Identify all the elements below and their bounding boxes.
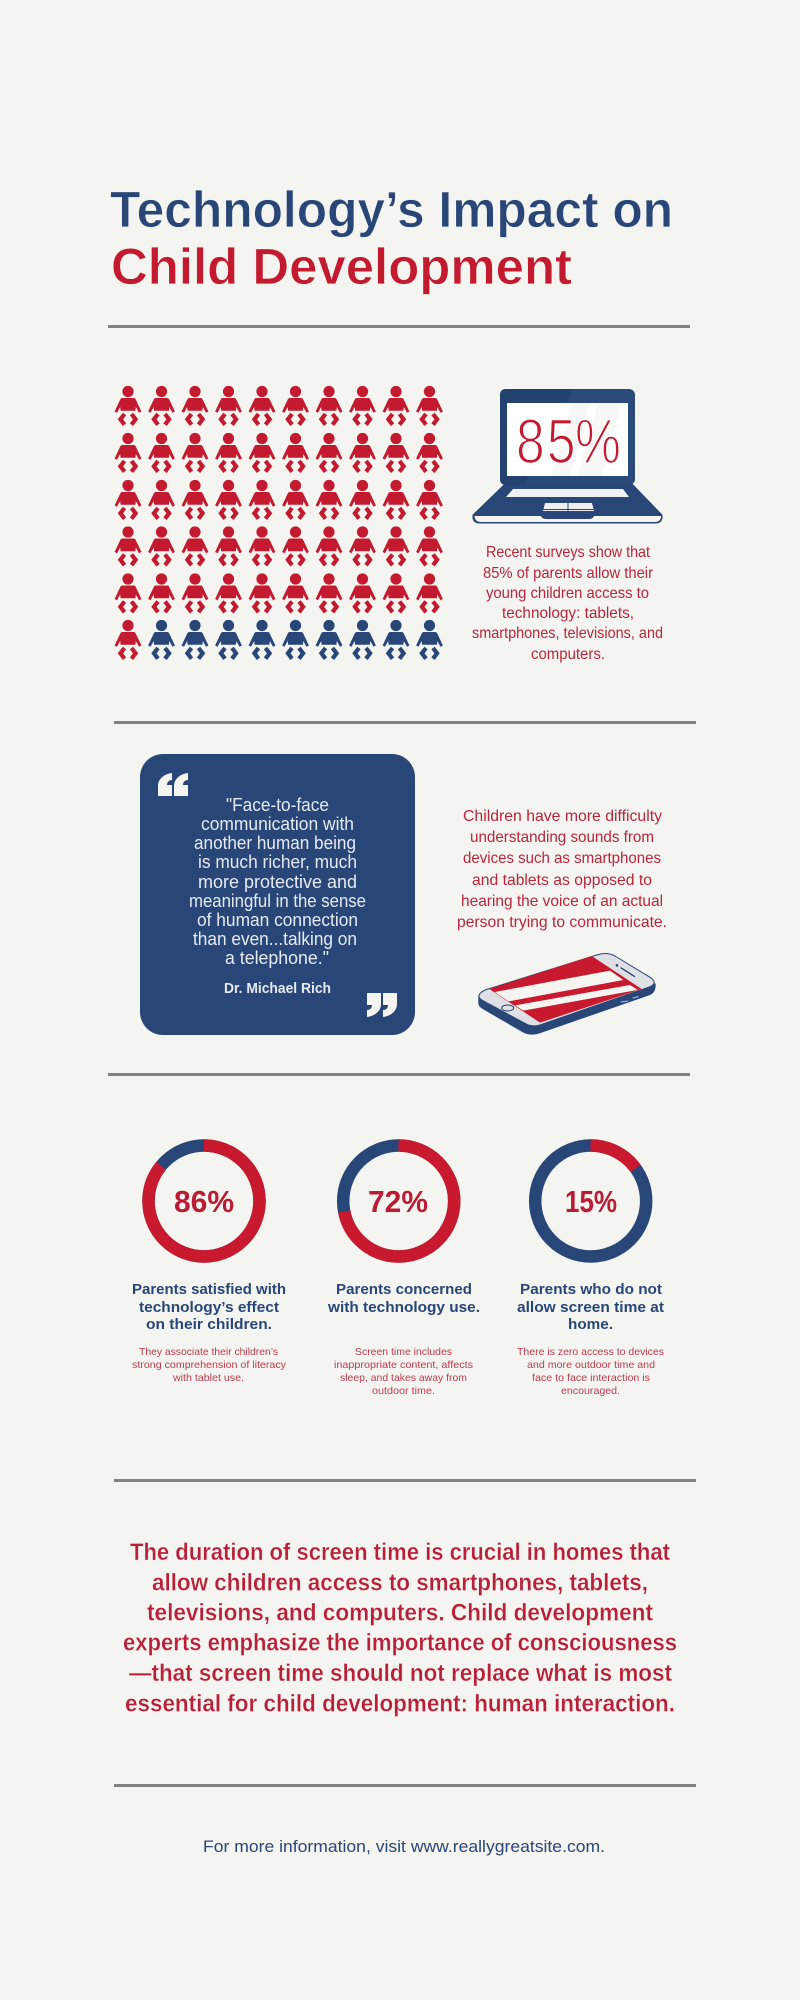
description bbox=[132, 1346, 287, 1384]
icon: laptop with 85%: 85% bbox=[516, 407, 621, 477]
text block: recent surveys: smartphones, televisions, and bbox=[472, 625, 663, 642]
heading: technology’s effect bbox=[139, 1300, 279, 1316]
heading: home. bbox=[568, 1317, 613, 1333]
description: sleep, and takes away from bbox=[340, 1372, 467, 1384]
footer: For more information, visit www.reallygreatsite.com. bbox=[203, 1837, 605, 1856]
description: They associate their children’s bbox=[139, 1346, 278, 1358]
heading: Parents concerned bbox=[336, 1282, 472, 1298]
text block: sounds from devices: Children have more difficulty bbox=[463, 808, 662, 825]
icon: closing quotation mark bbox=[367, 993, 397, 1017]
panel: quote bbox=[140, 754, 415, 1035]
heading bbox=[517, 1282, 664, 1333]
quote text: communication with bbox=[201, 814, 354, 834]
text block: sounds from devices: understanding sounds from bbox=[470, 829, 654, 846]
text block: sounds from devices: devices such as smartphones bbox=[463, 850, 661, 867]
donut chart: 72% bbox=[343, 1146, 454, 1256]
pictogram: 60 babies bbox=[115, 386, 443, 659]
icon: smartphone bbox=[478, 954, 656, 1035]
description: encouraged. bbox=[561, 1385, 620, 1397]
text block: recent surveys: technology: tablets, bbox=[502, 605, 634, 622]
description: Screen time includes bbox=[355, 1346, 452, 1358]
donut chart: 15%: 15% bbox=[565, 1184, 617, 1219]
text block: screen time statement: —that screen time should not replace what is most bbox=[129, 1660, 672, 1687]
heading bbox=[327, 1282, 480, 1316]
quote text: than even...talking on bbox=[193, 929, 357, 949]
quote attribution: Dr. Michael Rich bbox=[224, 981, 331, 997]
text block: screen time statement bbox=[123, 1539, 677, 1718]
quote text: another human being bbox=[194, 833, 356, 853]
text block: screen time statement: essential for child development: human interaction. bbox=[125, 1690, 675, 1718]
quote text: of human connection bbox=[197, 910, 358, 930]
text block: recent surveys: Recent surveys show that bbox=[486, 544, 650, 561]
donut chart: 86%: 86% bbox=[174, 1184, 234, 1219]
text block: recent surveys: 85% of parents allow their bbox=[483, 565, 654, 582]
heading: Parents who do not bbox=[520, 1282, 662, 1298]
panel: 15% stat bbox=[517, 1146, 664, 1397]
text block: recent surveys: computers. bbox=[531, 646, 605, 663]
panel: 86% stat bbox=[132, 1146, 287, 1384]
quote text: is much richer, much bbox=[198, 852, 357, 872]
panel: 72% stat bbox=[327, 1146, 480, 1397]
description: outdoor time. bbox=[372, 1385, 435, 1397]
text block: screen time statement: The duration of screen time is crucial in homes that bbox=[130, 1539, 670, 1566]
title: Technology’s Impact on bbox=[110, 181, 673, 238]
donut chart: 72%: 72% bbox=[368, 1184, 428, 1219]
text block: recent surveys bbox=[472, 544, 663, 663]
description: inappropriate content, affects bbox=[334, 1359, 473, 1371]
description: strong comprehension of literacy bbox=[132, 1359, 287, 1371]
description: There is zero access to devices bbox=[517, 1346, 664, 1358]
heading: allow screen time at bbox=[517, 1300, 664, 1316]
text block: sounds from devices bbox=[457, 808, 667, 931]
description bbox=[517, 1346, 664, 1397]
quote text bbox=[189, 795, 366, 968]
text block: screen time statement: televisions, and computers. Child development bbox=[147, 1600, 653, 1626]
quote text: a telephone." bbox=[225, 948, 329, 968]
quote text: meaningful in the sense bbox=[189, 891, 366, 911]
text block: sounds from devices: hearing the voice of an actual bbox=[461, 893, 663, 910]
heading: on their children. bbox=[146, 1317, 272, 1333]
description bbox=[334, 1346, 473, 1397]
title bbox=[110, 181, 673, 295]
donut chart: 86% bbox=[148, 1146, 260, 1256]
icon: laptop with 85% bbox=[473, 389, 662, 523]
heading bbox=[132, 1282, 286, 1333]
quote text: more protective and bbox=[198, 872, 357, 892]
heading: Parents satisfied with bbox=[132, 1282, 286, 1298]
quote text: "Face-to-face bbox=[226, 795, 329, 815]
description: face to face interaction is bbox=[532, 1372, 650, 1384]
description: and more outdoor time and bbox=[527, 1359, 655, 1371]
text block: screen time statement: allow children access to smartphones, tablets, bbox=[152, 1570, 648, 1596]
donut chart: 15% bbox=[535, 1146, 646, 1256]
icon: opening quotation mark bbox=[158, 773, 188, 796]
text block: recent surveys: young children access to bbox=[486, 585, 649, 602]
text block: screen time statement: experts emphasize the importance of consciousness bbox=[123, 1630, 677, 1656]
title: Child Development bbox=[111, 238, 572, 295]
text block: sounds from devices: person trying to communicate. bbox=[457, 914, 667, 931]
heading: with technology use. bbox=[327, 1300, 480, 1316]
text block: sounds from devices: and tablets as opposed to bbox=[472, 872, 652, 889]
description: with tablet use. bbox=[172, 1372, 244, 1384]
